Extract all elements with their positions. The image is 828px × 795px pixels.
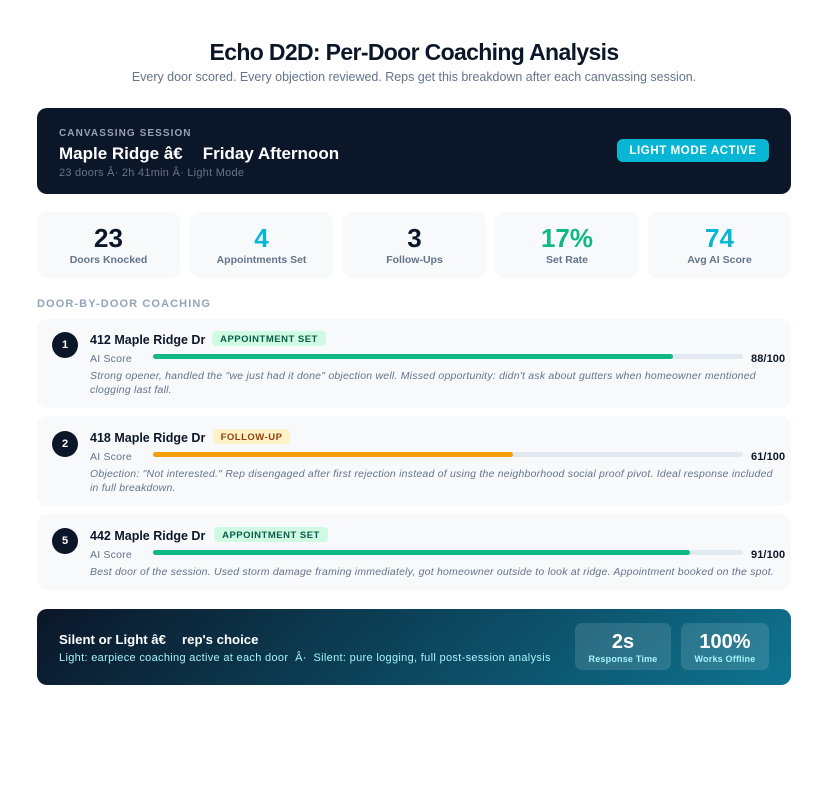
panel: door 5 bbox=[37, 514, 791, 590]
stat: doors knocked bbox=[37, 212, 180, 278]
stat: follow-ups: Follow-Ups bbox=[386, 254, 443, 266]
score bar bbox=[153, 550, 743, 555]
door number bbox=[52, 528, 78, 554]
score label: AI Score bbox=[90, 451, 132, 463]
door address: 412 Maple Ridge Dr bbox=[90, 333, 205, 347]
door address: 418 Maple Ridge Dr bbox=[90, 431, 205, 445]
coaching note: clogging last fall. bbox=[90, 384, 172, 396]
mode badge: LIGHT MODE ACTIVE bbox=[629, 145, 757, 157]
score value: 88/100 bbox=[751, 353, 785, 365]
coaching note bbox=[90, 370, 756, 396]
door number bbox=[52, 431, 78, 457]
coaching note: Objection: "Not interested." Rep disengaged after first rejection instead of using the neighborhood social proof pivot. Ideal response included bbox=[90, 468, 773, 480]
title: Echo D2D: Per-Door Coaching Analysis bbox=[210, 39, 618, 65]
score label: AI Score bbox=[90, 353, 132, 365]
panel: door 2 bbox=[37, 416, 791, 506]
banner heading: Silent or Light â€ rep's choice bbox=[59, 632, 258, 647]
score bar bbox=[153, 354, 743, 359]
panel: session header bbox=[37, 108, 791, 194]
stat: follow-ups: 3 bbox=[407, 223, 422, 253]
panel: footer banner bbox=[37, 609, 791, 685]
metric: response time: 2s bbox=[612, 631, 634, 653]
status badge: FOLLOW-UP bbox=[221, 432, 282, 443]
door number: 5 bbox=[62, 535, 68, 547]
stat: follow-ups bbox=[343, 212, 486, 278]
metric: works offline bbox=[681, 623, 769, 670]
score bar bbox=[153, 452, 743, 457]
metric: response time: Response Time bbox=[589, 654, 657, 664]
score label: AI Score bbox=[90, 549, 132, 561]
stat: set rate: 17% bbox=[541, 223, 593, 253]
door number bbox=[52, 332, 78, 358]
stat: appointments set: 4 bbox=[254, 223, 269, 253]
subtitle: Every door scored. Every objection reviewed. Reps get this breakdown after each canvassing session. bbox=[132, 70, 696, 84]
stat: doors knocked: Doors Knocked bbox=[70, 254, 147, 266]
door address: 442 Maple Ridge Dr bbox=[90, 529, 205, 543]
metric: works offline: 100% bbox=[699, 631, 751, 653]
coaching note: Best door of the session. Used storm damage framing immediately, got homeowner outside to look at ridge. Appointment booked on the spot. bbox=[90, 566, 774, 578]
score value: 61/100 bbox=[751, 451, 785, 463]
coaching note bbox=[90, 468, 773, 494]
section heading: DOOR-BY-DOOR COACHING bbox=[37, 298, 211, 310]
score value: 91/100 bbox=[751, 549, 785, 561]
door number: 2 bbox=[62, 438, 68, 450]
session eyebrow: CANVASSING SESSION bbox=[59, 128, 192, 139]
door number: 1 bbox=[62, 339, 68, 351]
metric: response time bbox=[575, 623, 671, 670]
status badge: APPOINTMENT SET bbox=[220, 334, 318, 345]
banner text: Light: earpiece coaching active at each door Â· Silent: pure logging, full post-session analysis bbox=[59, 652, 551, 664]
stat: avg AI score: Avg AI Score bbox=[687, 254, 752, 266]
status badge: APPOINTMENT SET bbox=[222, 530, 320, 541]
stat: doors knocked: 23 bbox=[94, 223, 123, 253]
status badge bbox=[213, 429, 290, 444]
status badge bbox=[212, 331, 326, 346]
stat: set rate bbox=[495, 212, 639, 278]
session name: Maple Ridge â€ Friday Afternoon bbox=[59, 144, 339, 163]
stat: avg AI score: 74 bbox=[705, 223, 734, 253]
stat: appointments set: Appointments Set bbox=[217, 254, 306, 266]
stat: set rate: Set Rate bbox=[546, 254, 588, 266]
coaching note: in full breakdown. bbox=[90, 482, 176, 494]
metric: works offline: Works Offline bbox=[695, 654, 755, 664]
mode badge bbox=[617, 139, 769, 162]
stat: appointments set bbox=[190, 212, 333, 278]
panel: door 1 bbox=[37, 319, 791, 408]
stat: avg AI score bbox=[648, 212, 791, 278]
session details: 23 doors Â· 2h 41min Â· Light Mode bbox=[59, 167, 244, 179]
coaching note: Strong opener, handled the "we just had it done" objection well. Missed opportunity: didn't ask about gutters when homeowner mentioned bbox=[90, 370, 756, 382]
status badge bbox=[214, 527, 328, 542]
